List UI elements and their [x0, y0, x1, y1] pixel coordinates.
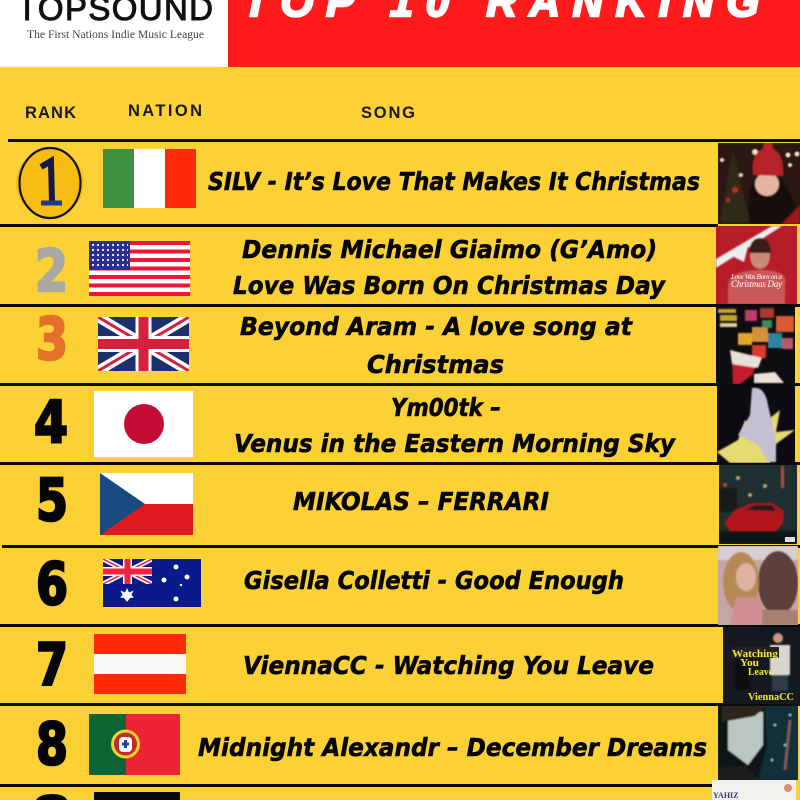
album cover 7: Watching — [732, 648, 779, 660]
rank numbers: 5 — [36, 466, 68, 534]
song titles — [198, 167, 707, 762]
album cover 5 — [719, 465, 797, 544]
flag: Austria — [94, 634, 186, 694]
column headers: NATION — [128, 102, 202, 120]
album cover 9 (cropped) — [712, 780, 796, 800]
column headers — [25, 102, 415, 122]
album cover 2 — [716, 226, 797, 304]
logo tagline: The First Nations Indie Music League — [27, 27, 204, 41]
song 3: Christmas — [367, 350, 504, 379]
flag: Australia — [103, 559, 201, 607]
rank numbers: 2 — [35, 237, 68, 305]
song 4: Venus in the Eastern Morning Sky — [234, 429, 677, 458]
album cover 2: Christmas Day — [731, 279, 782, 289]
flag: rank 9 (cropped) — [94, 792, 180, 800]
song 1: SILV - It’s Love That Makes It Christmas — [208, 167, 700, 196]
flag: Portugal — [89, 714, 180, 775]
song 5: MIKOLAS – FERRARI — [293, 487, 549, 516]
album cover 7 — [723, 627, 800, 704]
song 4 — [234, 393, 677, 458]
flag: Czech Republic — [100, 473, 193, 535]
flag: Italy — [103, 149, 196, 208]
song 3 — [240, 312, 633, 379]
song 2: Dennis Michael Giaimo (G’Amo) — [242, 235, 657, 264]
album cover 7: You — [740, 657, 759, 669]
rank numbers: 6 — [36, 550, 68, 618]
rank numbers: 3 — [36, 305, 68, 373]
title banner — [228, 0, 800, 67]
logo panel — [0, 0, 228, 67]
song 4: Ym00tk – — [391, 393, 501, 422]
album cover 9 (cropped): YAHIZ — [713, 791, 738, 800]
album cover 7: Leave — [748, 666, 773, 678]
album cover 1 — [718, 141, 800, 224]
album cover 8 — [718, 706, 798, 780]
flag: Japan — [94, 391, 193, 457]
rank numbers: 7 — [36, 631, 68, 699]
album cover 4 — [717, 386, 795, 463]
rank numbers: 4 — [34, 388, 68, 456]
column headers: RANK — [25, 104, 76, 122]
song 7: ViennaCC - Watching You Leave — [243, 651, 654, 680]
flag: UK — [98, 317, 189, 371]
column headers: SONG — [361, 104, 415, 122]
song 2 — [233, 235, 667, 300]
song 8: Midnight Alexandr – December Dreams — [198, 733, 707, 762]
song 6: Gisella Colletti - Good Enough — [244, 566, 624, 595]
album cover 3 — [716, 306, 795, 384]
rank numbers: 8 — [36, 710, 68, 778]
flag: USA — [89, 241, 190, 296]
rank numbers — [34, 237, 68, 778]
rank 1 badge — [16, 148, 84, 218]
album cover 7: ViennaCC — [748, 691, 794, 703]
album cover 2: Love Was Born on a — [730, 273, 782, 281]
album cover 6 — [718, 546, 798, 625]
song 2: Love Was Born On Christmas Day — [233, 271, 667, 300]
song 3: Beyond Aram - A love song at — [240, 312, 633, 341]
rank 9 numeral (cropped by frame) — [36, 794, 67, 800]
